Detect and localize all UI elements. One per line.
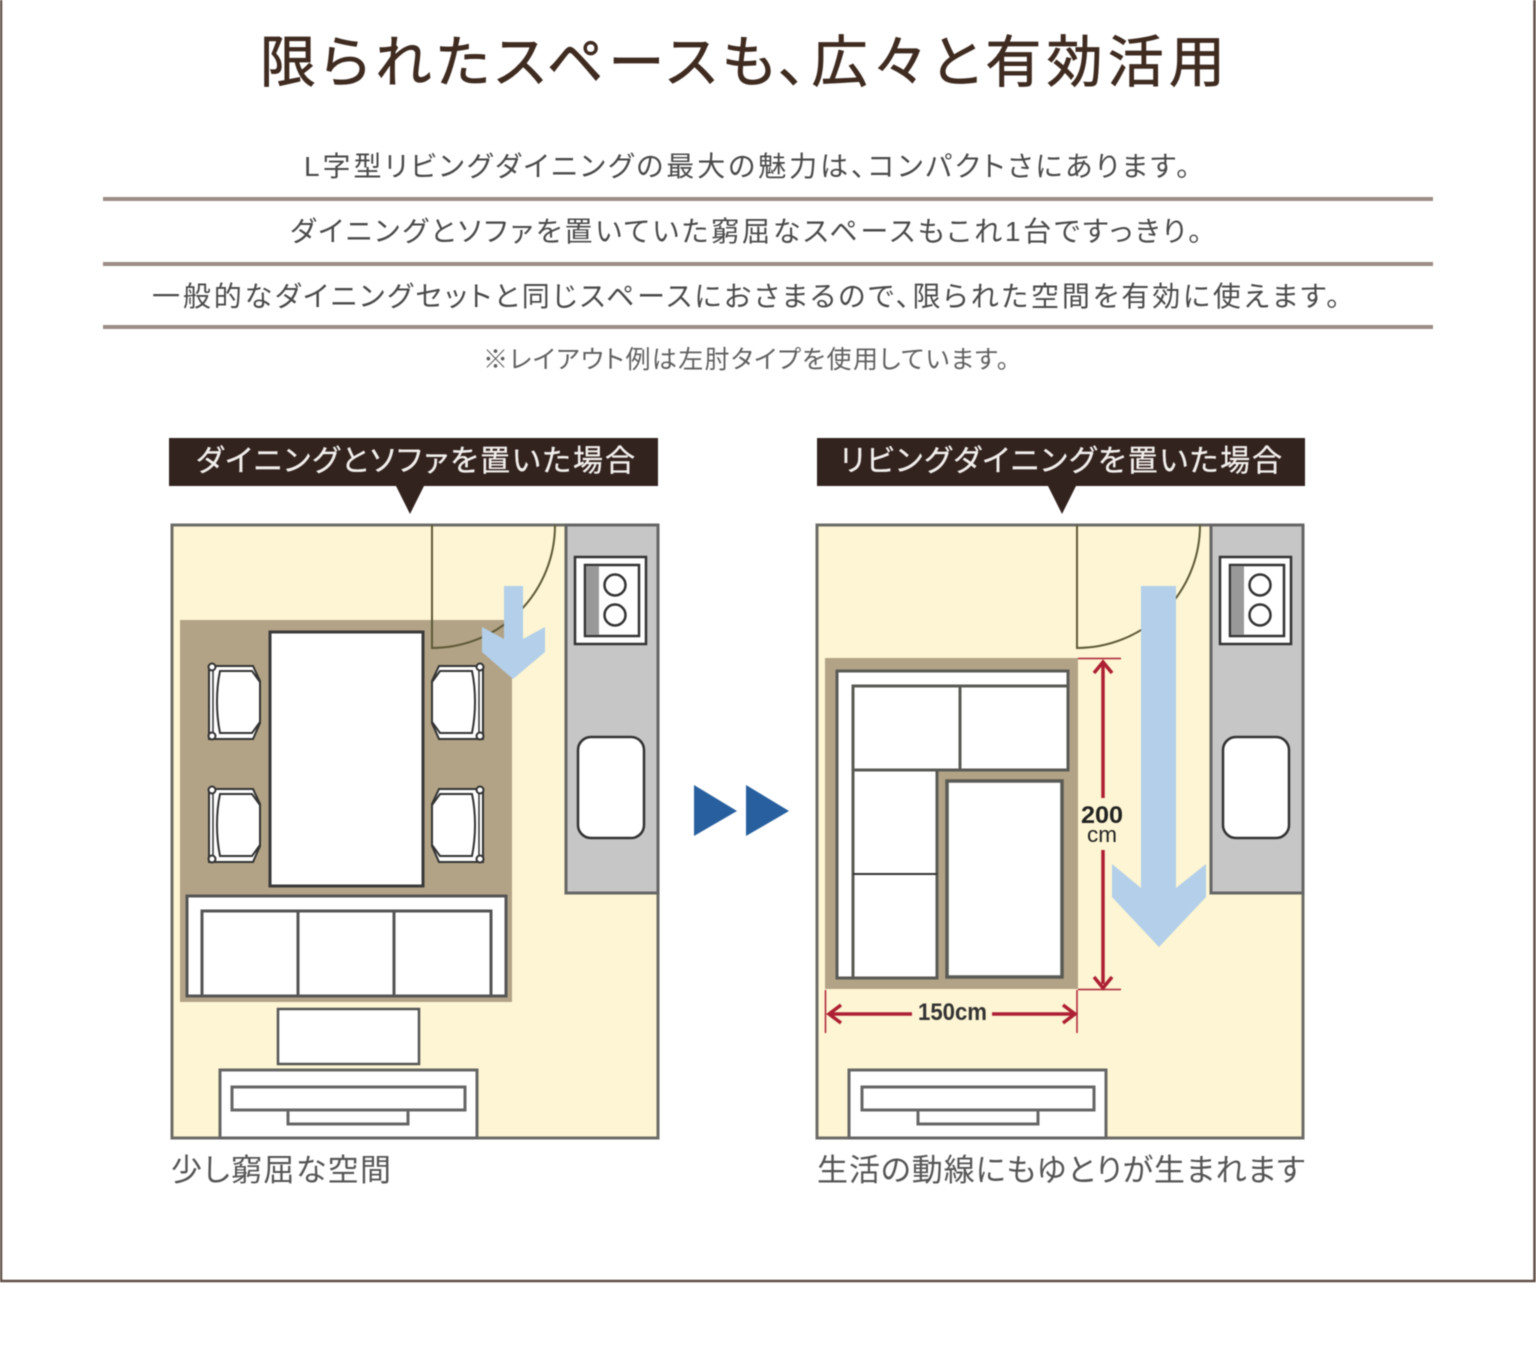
room floor bbox=[817, 525, 1303, 1138]
left heading banner: ダイニングとソファを置いた場合 bbox=[196, 445, 635, 478]
text line 1: L字型リビングダイニングの最大の魅力は、コンパクトさにあります。 bbox=[304, 151, 1190, 182]
living dining table bbox=[947, 781, 1062, 977]
room floor bbox=[172, 525, 658, 1138]
text line 3: 一般的なダイニングセットと同じスペースにおさまるので、限られた空間を有効に使えます。 bbox=[152, 281, 1340, 312]
title: 限られたスペースも、広々と有効活用 bbox=[260, 31, 1225, 94]
height dimension 200cm: 200 bbox=[1081, 802, 1123, 829]
height dimension 200cm bbox=[1078, 658, 1123, 990]
tv stand bbox=[220, 1070, 477, 1138]
stove bbox=[1220, 557, 1291, 644]
double arrow between plans bbox=[694, 785, 789, 836]
right heading banner: リビングダイニングを置いた場合 bbox=[840, 445, 1282, 478]
width dimension 150cm bbox=[826, 990, 1077, 1033]
left heading banner bbox=[169, 438, 658, 514]
tv stand bbox=[849, 1070, 1106, 1138]
text line 2: ダイニングとソファを置いていた窮屈なスペースもこれ1台ですっきり。 bbox=[290, 216, 1202, 247]
sink bbox=[1223, 737, 1289, 838]
chair bottom left bbox=[208, 786, 260, 862]
rug bbox=[825, 658, 1078, 989]
right caption: 生活の動線にもゆとりが生まれます bbox=[817, 1153, 1305, 1188]
sofa bbox=[187, 896, 506, 996]
left caption: 少し窮屈な空間 bbox=[171, 1153, 391, 1188]
width dimension 150cm: 150cm bbox=[918, 999, 987, 1026]
dining table bbox=[270, 632, 423, 886]
chair top left bbox=[208, 664, 260, 740]
layout note: ※レイアウト例は左肘タイプを使用しています。 bbox=[483, 346, 1009, 374]
left floor plan bbox=[172, 525, 658, 1138]
sink bbox=[578, 737, 644, 838]
chair top right bbox=[432, 664, 484, 740]
stove bbox=[575, 557, 646, 644]
wide circulation arrow bbox=[1112, 586, 1206, 947]
coffee table bbox=[278, 1009, 419, 1064]
kitchen counter bbox=[1211, 525, 1303, 893]
height dimension 200cm: cm bbox=[1087, 822, 1117, 847]
kitchen counter bbox=[566, 525, 658, 893]
narrow circulation arrow bbox=[482, 586, 545, 679]
rug bbox=[180, 620, 512, 1002]
right floor plan bbox=[817, 525, 1303, 1138]
door swing bbox=[432, 525, 555, 648]
right heading banner bbox=[817, 438, 1305, 514]
intro text block bbox=[103, 151, 1433, 329]
L-shaped living dining sofa bbox=[837, 671, 1068, 978]
chair bottom right bbox=[432, 786, 484, 862]
door swing bbox=[1077, 525, 1200, 648]
